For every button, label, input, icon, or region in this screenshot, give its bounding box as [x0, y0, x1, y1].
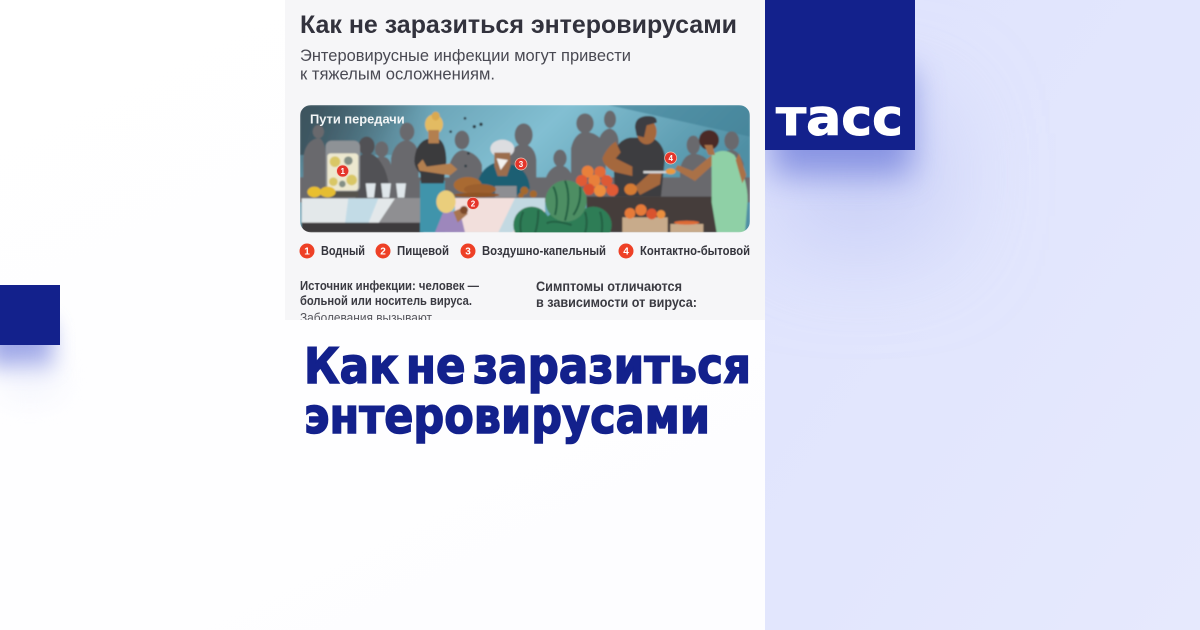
illustration: market scene with transmission routes: [300, 105, 750, 232]
logo wordmark: тасс: [776, 89, 903, 147]
infographic thumbnail: [285, 0, 765, 325]
infographic subtitle: к тяжелым осложнениям.: [300, 64, 495, 84]
text block: symptoms: [536, 279, 697, 310]
flies: [449, 117, 483, 167]
infographic title: Как не заразиться энтеровирусами: [300, 11, 737, 39]
page background: left white area: [0, 0, 765, 630]
text block: symptoms: Симптомы отличаются: [536, 279, 682, 294]
box of peaches: [622, 217, 668, 232]
child: [435, 212, 465, 232]
text block: source of infection: [300, 280, 479, 320]
legend item 1: [300, 244, 365, 258]
marker 3 at old woman: 3: [519, 160, 524, 169]
legend item 3: 3: [465, 246, 471, 258]
main heading: Как не заразиться: [304, 338, 751, 395]
marker 4 at hands: [665, 152, 677, 164]
legend item 4: 4: [623, 246, 629, 258]
right table: [587, 197, 718, 232]
small blue square on left edge: [0, 285, 60, 345]
main heading: энтеровирусами: [304, 388, 710, 445]
peaches pile: [576, 166, 618, 197]
page background: right lavender area: [765, 0, 1200, 630]
illustration caption: Пути передачи: [310, 113, 405, 127]
jar: [326, 141, 360, 192]
infographic subtitle: Энтеровирусные инфекции могут привести: [300, 46, 631, 65]
marker 3 at old woman: [515, 158, 527, 170]
lemons: [307, 187, 321, 197]
TASS logo block: [765, 0, 915, 150]
legend item 2: Пищевой: [397, 244, 449, 258]
legend: transmission routes: [300, 244, 750, 258]
legend item 2: [376, 244, 449, 258]
middle table with pink and blue cloth: [455, 198, 545, 232]
marker 4 at hands: 4: [668, 154, 673, 163]
text block: source of infection: больной или носитель вируса.: [300, 294, 472, 308]
legend item 1: Водный: [321, 244, 365, 258]
main heading: [304, 338, 751, 445]
cups: [366, 183, 406, 198]
legend item 2: 2: [380, 246, 386, 258]
woman in green dress: [675, 154, 713, 181]
text block: symptoms: в зависимости от вируса:: [536, 295, 697, 310]
decorative square shadow on left edge: [0, 322, 60, 400]
text block: source of infection: Заболевания вызывают: [300, 311, 432, 325]
marker 1 on jar: 1: [340, 167, 345, 176]
seller man: [613, 138, 665, 197]
sky background: [300, 105, 750, 232]
marker 2 on table: 2: [471, 199, 476, 208]
legend item 4: Контактно-бытовой: [640, 244, 750, 258]
bread: [454, 177, 482, 193]
legend item 3: Воздушно-капельный: [482, 244, 606, 258]
old woman sneezing: [477, 163, 530, 195]
infographic subtitle: [300, 49, 630, 80]
marker 2 on table: [467, 197, 479, 209]
crowd silhouettes: [300, 111, 750, 202]
left table with jar and cups: [300, 197, 396, 224]
marker 1 on jar: [337, 165, 349, 177]
legend item 1: 1: [304, 246, 310, 258]
watermelons: [512, 206, 548, 232]
text block: source of infection: Источник инфекции: человек —: [300, 279, 479, 293]
woman standing: [420, 181, 445, 232]
